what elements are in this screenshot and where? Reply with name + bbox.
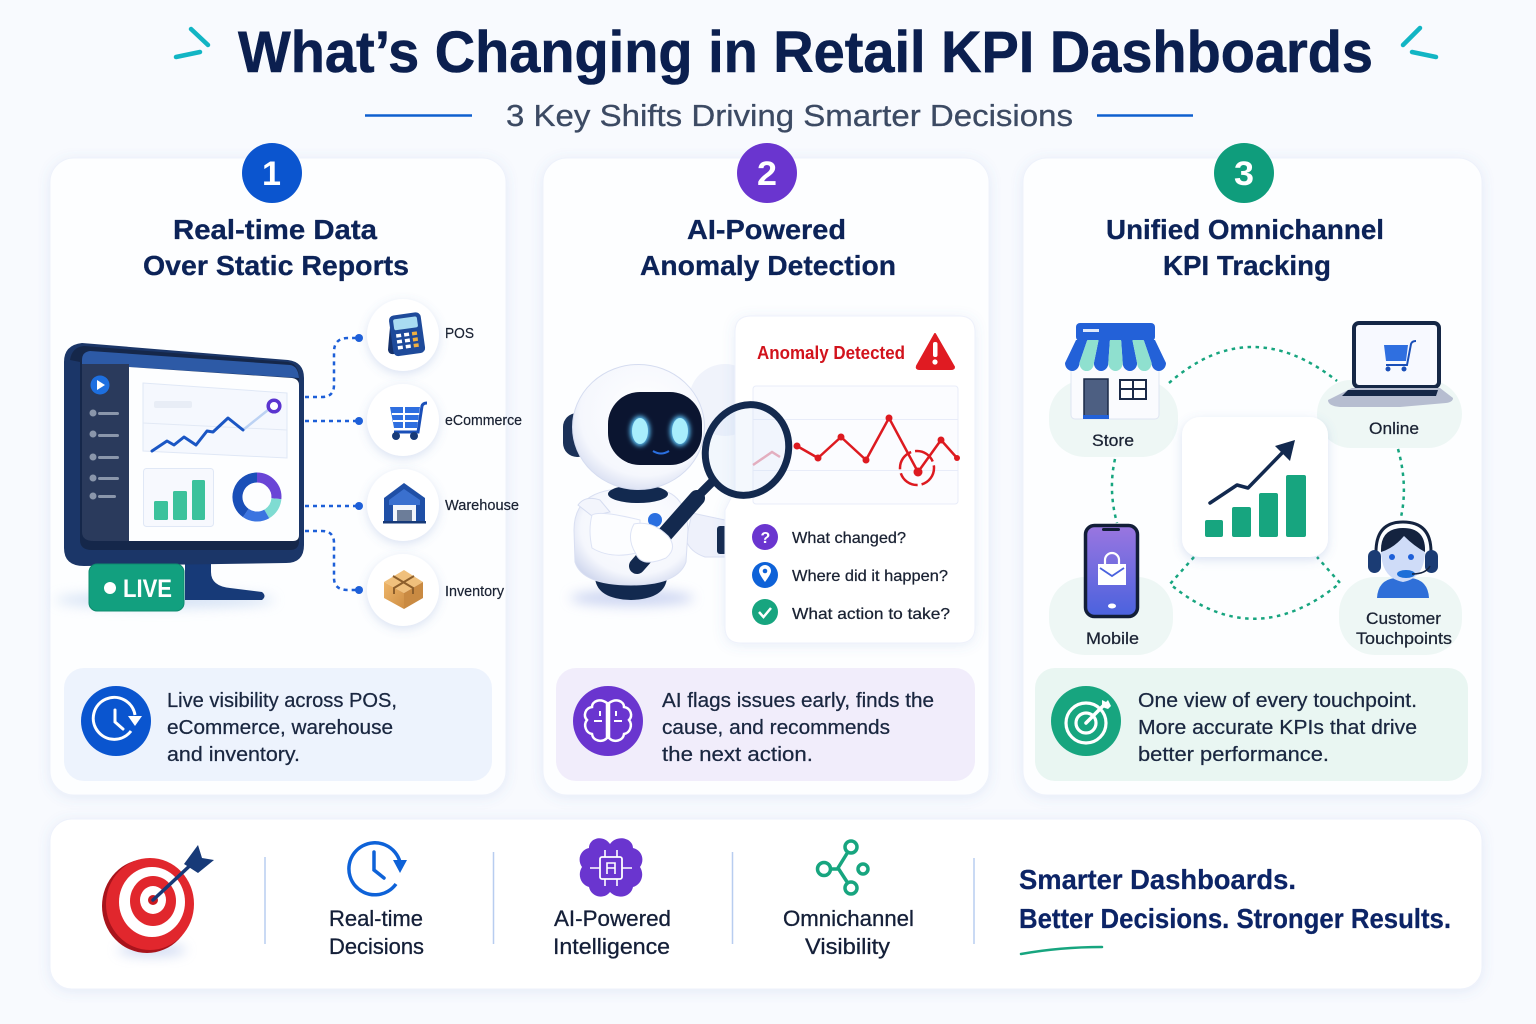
icon: right spark accent: [1403, 28, 1436, 57]
title: What’s Changing in Retail KPI Dashboards: [238, 20, 1373, 85]
label: POS: POS: [445, 325, 474, 342]
connector end dots: [355, 334, 363, 594]
number badge 3: 3: [1234, 155, 1254, 193]
question 3: [752, 599, 950, 625]
label: Inventory: Inventory: [445, 583, 504, 600]
label: customer touchpoints: [1356, 609, 1452, 648]
anomaly line chart: [753, 386, 960, 504]
callout 1 text: [167, 690, 397, 766]
callout 2: [556, 668, 975, 781]
label: Store: Store: [1092, 431, 1134, 450]
icon: warehouse: [367, 469, 439, 541]
heading 1: [143, 214, 409, 281]
heading 3: KPI Tracking: [1163, 250, 1331, 281]
callout 2 text: AI flags issues early, finds the: [662, 690, 934, 712]
icon: laptop: [1328, 323, 1453, 407]
callout 3 text: better performance.: [1138, 744, 1329, 766]
number badge 2: 2: [757, 155, 777, 193]
number badge 2: [737, 143, 797, 203]
panel: omnichannel: [1023, 143, 1482, 795]
magnifier and robot hand: [630, 392, 802, 566]
benefit: real-time: [329, 843, 424, 959]
bottom summary bar: [50, 819, 1482, 989]
dashed connection ring: [1112, 347, 1404, 619]
icon: clock refresh: [81, 686, 151, 756]
callout 3 text: [1138, 690, 1417, 766]
label: customer touchpoints: Touchpoints: [1356, 629, 1452, 648]
label: eCommerce: eCommerce: [445, 412, 522, 429]
number badge 1: 1: [262, 155, 281, 193]
subtitle: 3 Key Shifts Driving Smarter Decisions: [506, 98, 1073, 133]
tagline: Better Decisions. Stronger Results.: [1019, 903, 1451, 934]
benefit: AI-powered: AI-Powered: [554, 906, 671, 931]
icon: store: [1065, 323, 1166, 419]
badge: LIVE: LIVE: [123, 575, 172, 603]
tagline: [1019, 864, 1451, 954]
anomaly heading: Anomaly Detected: [757, 343, 905, 363]
callout 1: [64, 668, 492, 781]
question 1: What changed?: [792, 530, 906, 547]
illustration: monitor: [55, 343, 304, 608]
callout 3 text: More accurate KPIs that drive: [1138, 717, 1417, 739]
illustration: robot: [563, 364, 761, 606]
icon: inventory box: [367, 554, 439, 626]
label: Online: Online: [1369, 419, 1419, 438]
label: Warehouse: Warehouse: [445, 497, 519, 514]
number badge 1: [242, 143, 302, 203]
question 1: ?: [760, 530, 770, 547]
callout 1 text: and inventory.: [167, 744, 300, 766]
badge: LIVE: [89, 564, 184, 611]
icon: POS: [367, 299, 439, 371]
benefit: real-time: Decisions: [329, 934, 424, 959]
icon: warning: [917, 334, 954, 369]
icon: brain: [573, 686, 643, 756]
heading 3: [1106, 214, 1384, 281]
icon: shopping cart: [367, 384, 439, 456]
question 2: [752, 562, 948, 588]
connectors: [305, 338, 358, 590]
node backgrounds: [1049, 380, 1462, 655]
icon: bullseye with dart: [102, 845, 214, 956]
callout 1 text: Live visibility across POS,: [167, 690, 397, 712]
panel: real-time data: [50, 143, 522, 795]
heading 1: Real-time Data: [173, 214, 377, 245]
heading 2: AI-Powered: [687, 214, 846, 245]
label: customer touchpoints: Customer: [1366, 609, 1441, 628]
callout 3: [1035, 668, 1468, 781]
question 2: Where did it happen?: [792, 568, 948, 585]
heading 3: Unified Omnichannel: [1106, 214, 1384, 245]
label: Mobile: Mobile: [1086, 629, 1139, 648]
benefit: omnichannel: [783, 841, 914, 959]
icon: target: [1051, 686, 1121, 756]
heading 2: Anomaly Detection: [640, 250, 896, 281]
icon: left spark accent: [176, 29, 208, 57]
question 3: What action to take?: [792, 606, 950, 623]
central KPI tile: [1182, 417, 1328, 557]
benefit: omnichannel: Omnichannel: [783, 906, 914, 931]
benefit: AI-powered: [553, 838, 671, 959]
benefit: omnichannel: Visibility: [805, 934, 890, 959]
number badge 3: [1214, 143, 1274, 203]
icon: mobile: [1086, 526, 1138, 616]
tagline: Smarter Dashboards.: [1019, 864, 1296, 895]
panel: anomaly detection: [543, 143, 989, 795]
benefit: AI-powered: Intelligence: [553, 934, 670, 959]
heading 1: Over Static Reports: [143, 250, 409, 281]
callout 1 text: eCommerce, warehouse: [167, 717, 393, 739]
callout 2 text: cause, and recommends: [662, 717, 890, 739]
callout 2 text: [662, 690, 934, 766]
icon: customer agent: [1368, 522, 1438, 598]
question 1: [752, 524, 906, 550]
anomaly card: [725, 316, 975, 643]
benefit: real-time: Real-time: [329, 906, 423, 931]
heading 2: [640, 214, 896, 281]
callout 2 text: the next action.: [662, 744, 813, 766]
callout 3 text: One view of every touchpoint.: [1138, 690, 1417, 712]
